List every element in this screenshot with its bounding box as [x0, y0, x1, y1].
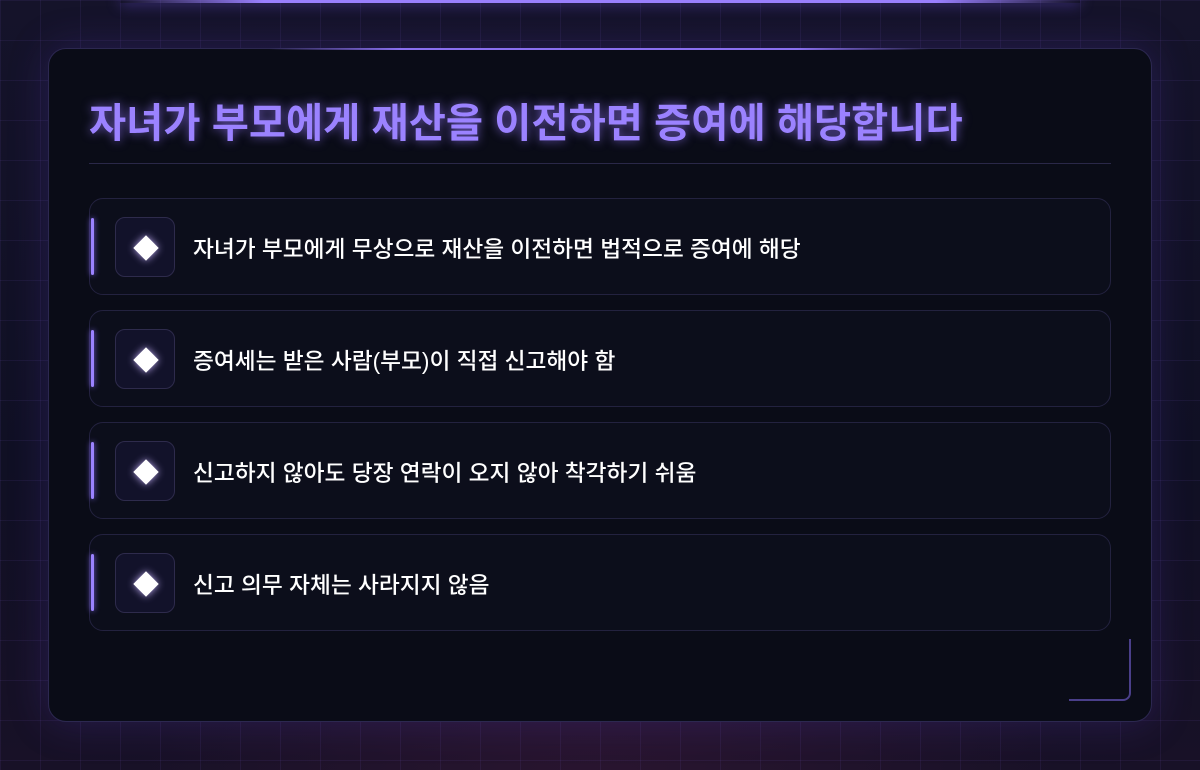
item 3	[89, 422, 1111, 519]
icon: diamond	[115, 553, 175, 613]
icon: diamond	[115, 217, 175, 277]
item 2	[89, 310, 1111, 407]
icon: diamond	[115, 441, 175, 501]
corner bracket	[1069, 639, 1131, 701]
text 4: 신고 의무 자체는 사라지지 않음	[193, 572, 490, 598]
item 1	[89, 198, 1111, 295]
text 1: 자녀가 부모에게 무상으로 재산을 이전하면 법적으로 증여에 해당	[193, 236, 801, 262]
title: 자녀가 부모에게 재산을 이전하면 증여에 해당합니다	[89, 100, 963, 146]
icon: diamond	[115, 329, 175, 389]
text 2: 증여세는 받은 사람(부모)이 직접 신고해야 함	[193, 348, 615, 374]
text 3: 신고하지 않아도 당장 연락이 오지 않아 착각하기 쉬움	[193, 460, 696, 486]
item 4	[89, 534, 1111, 631]
